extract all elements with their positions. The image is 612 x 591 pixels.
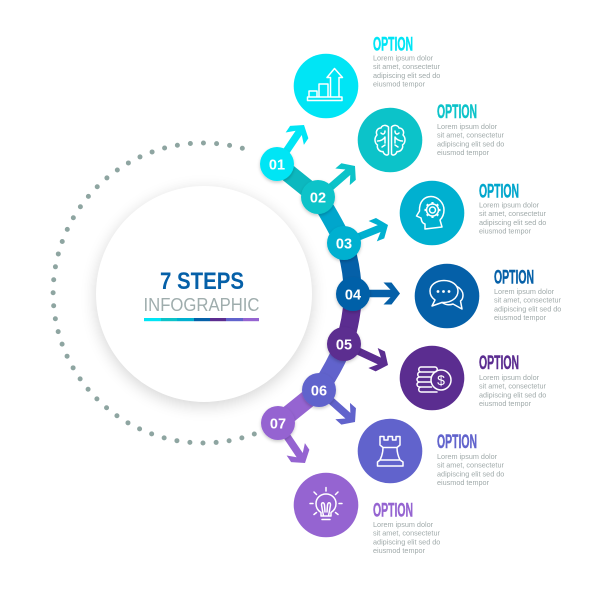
icon: brain	[358, 108, 422, 172]
icon: head with gear	[400, 181, 464, 245]
text block: option 3: Lorem ipsum dolor	[479, 200, 540, 210]
text block: option 6: eiusmod tempor	[437, 478, 490, 487]
text block: option 1: adipiscing elit sed do	[373, 71, 440, 80]
text block: option 4: sit amet, consectetur	[494, 296, 561, 304]
text block: option 5: sit amet, consectetur	[479, 382, 546, 390]
gradient colour bar	[144, 318, 259, 321]
step numbers: 04	[345, 288, 361, 304]
text block: option 7: OPTION	[373, 500, 413, 522]
text block: option 1: Lorem ipsum dolor	[373, 54, 434, 62]
text block: option 3: OPTION	[479, 182, 519, 202]
step numbers: 03	[336, 236, 352, 252]
text block: option 2: sit amet, consectetur	[437, 130, 504, 140]
text block: option 7: eiusmod tempor	[373, 546, 426, 555]
title: 7 steps: 7 STEPS	[160, 268, 244, 295]
text block: option 6: Lorem ipsum dolor	[437, 452, 498, 461]
text block: option 4: eiusmod tempor	[494, 313, 547, 322]
text block: option 1: sit amet, consectetur	[373, 62, 440, 71]
subtitle: infographic: INFOGRAPHIC	[144, 294, 260, 315]
arrows	[269, 119, 400, 469]
text block: option 7	[373, 500, 440, 555]
text block: option 2	[437, 102, 504, 157]
step connectors	[277, 164, 353, 423]
dotted ring	[53, 143, 254, 443]
text block: option 7: Lorem ipsum dolor	[373, 520, 434, 529]
icon: light bulb	[294, 473, 358, 537]
icon: growth chart	[294, 54, 358, 118]
icon: speech bubbles	[415, 264, 479, 328]
text block: option 6: OPTION	[437, 432, 477, 453]
text block: option 7: sit amet, consectetur	[373, 528, 440, 538]
text block: option 1: OPTION	[373, 34, 413, 56]
icon: chess rook	[358, 419, 422, 483]
text block: option 5: adipiscing elit sed do	[479, 390, 546, 399]
text block: option 2: OPTION	[437, 102, 477, 123]
text block: option 3: sit amet, consectetur	[479, 209, 546, 218]
text block: option 7: adipiscing elit sed do	[373, 537, 440, 546]
text block: option 2: eiusmod tempor	[437, 148, 490, 157]
step numbers: 02	[310, 190, 326, 206]
text block: option 4	[494, 268, 561, 322]
text block: option 1: eiusmod tempor	[373, 80, 426, 88]
step numbers: 01	[269, 158, 285, 174]
text block: option 2: adipiscing elit sed do	[437, 139, 504, 148]
text block: option 6: adipiscing elit sed do	[437, 469, 504, 478]
text block: option 4: adipiscing elit sed do	[494, 304, 561, 313]
text block: option 5: Lorem ipsum dolor	[479, 373, 540, 382]
text block: option 3: adipiscing elit sed do	[479, 218, 546, 227]
text block: option 4: OPTION	[494, 268, 534, 288]
icon: coins: $	[437, 372, 445, 388]
step numbers: 07	[270, 416, 286, 432]
text block: option 6: sit amet, consectetur	[437, 460, 504, 470]
text block: option 4: Lorem ipsum dolor	[494, 287, 555, 296]
text block: option 5	[479, 353, 546, 408]
step numbers	[260, 147, 370, 440]
text block: option 3: eiusmod tempor	[479, 226, 532, 236]
text block: option 5: OPTION	[479, 353, 519, 374]
step numbers: 05	[336, 338, 352, 354]
text block: option 1	[373, 34, 440, 88]
text block: option 2: Lorem ipsum dolor	[437, 122, 498, 131]
icon: coins	[400, 346, 464, 410]
text block: option 5: eiusmod tempor	[479, 399, 532, 408]
text block: option 3	[479, 182, 546, 236]
central circle	[96, 186, 312, 406]
text block: option 6	[437, 432, 504, 487]
step numbers: 06	[311, 384, 327, 400]
